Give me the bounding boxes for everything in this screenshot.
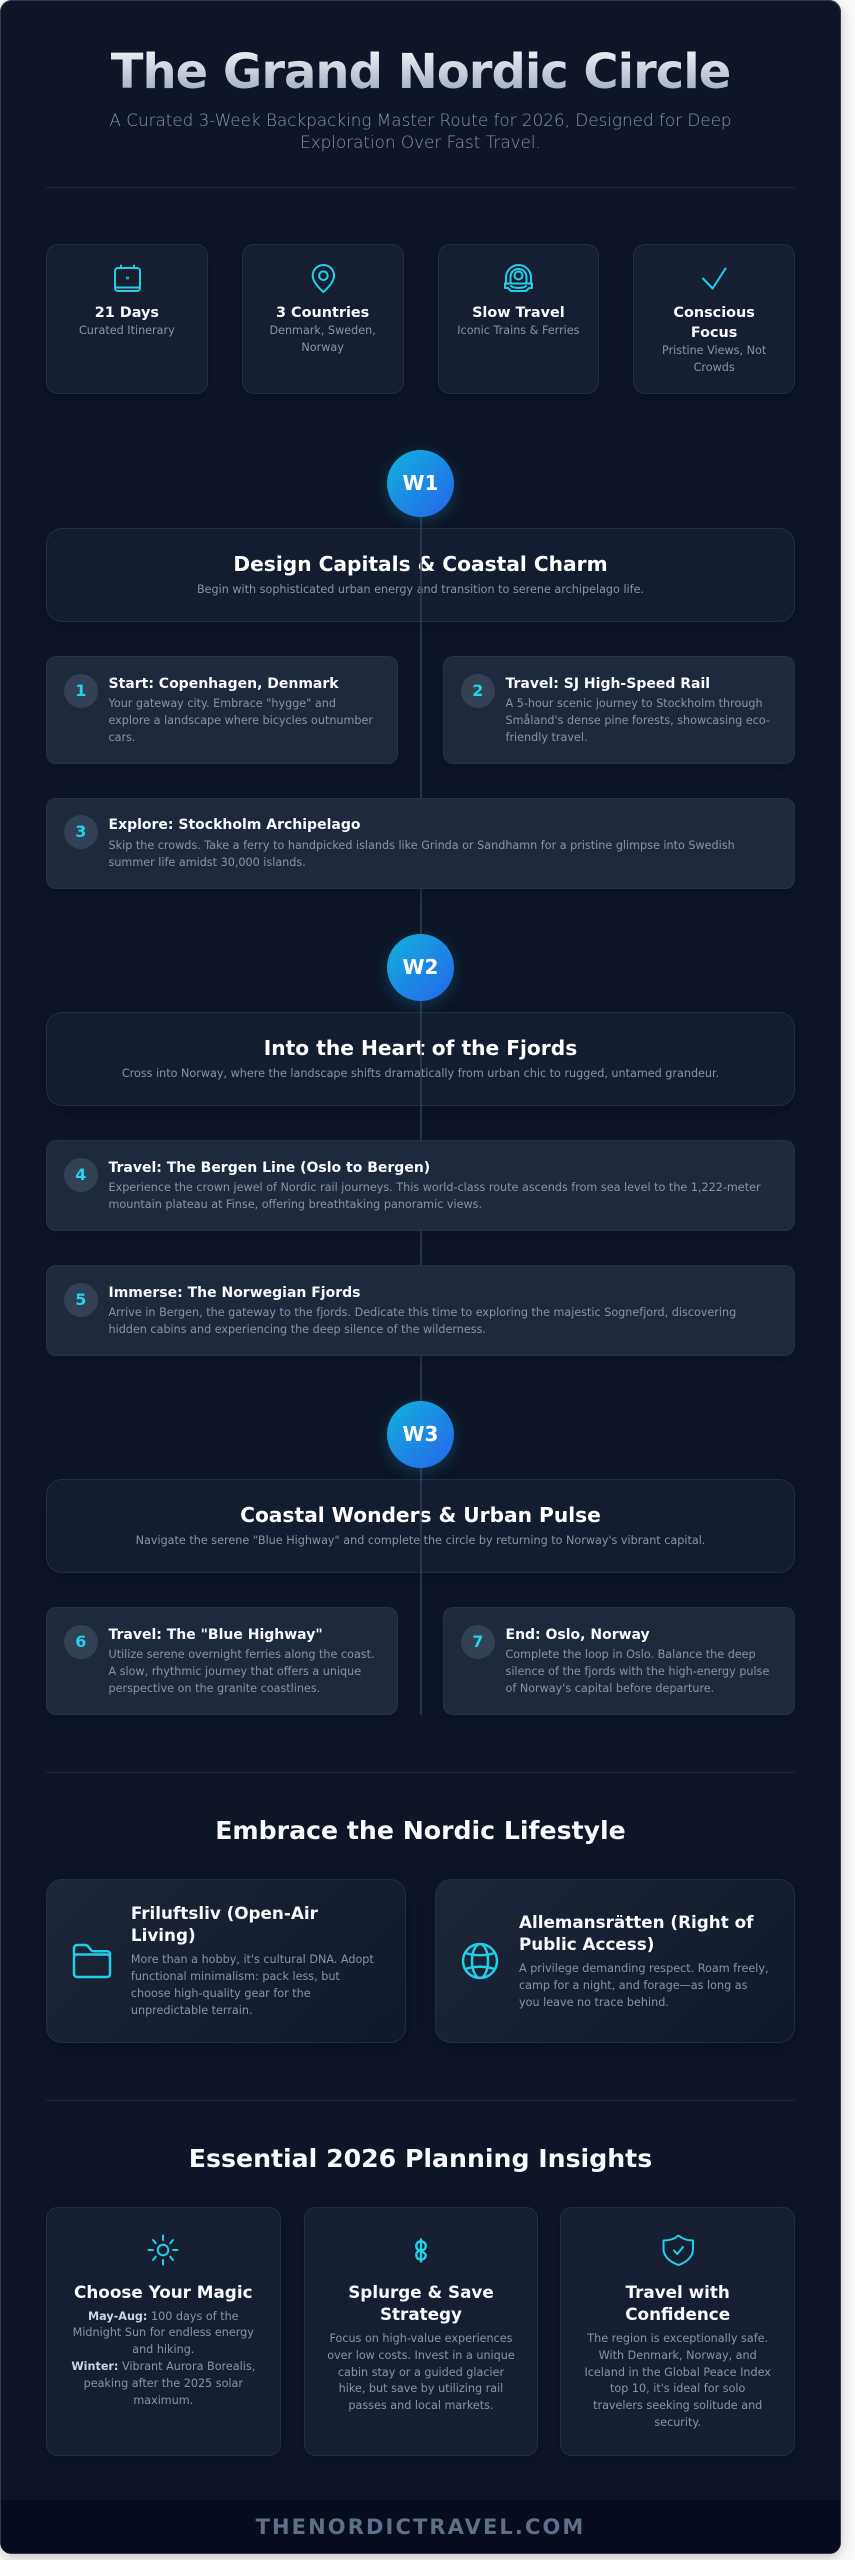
step description: perspective on the granite coastlines. (108, 1682, 320, 1695)
stat caption (662, 344, 766, 374)
panel: stat slow travel (438, 244, 599, 394)
step description: cars. (108, 731, 136, 744)
insight title: Confidence (625, 2304, 730, 2324)
step number (64, 1158, 98, 1192)
lifestyle title: Friluftsliv (Open-Air (131, 1903, 318, 1923)
panel: stat conscious focus (633, 244, 795, 394)
lifestyle description (519, 1962, 769, 2009)
insight description: May-Aug: 100 days of the (88, 2310, 239, 2323)
stat heading (673, 305, 755, 341)
step description: friendly travel. (506, 731, 588, 744)
panel: stat 3 countries (242, 244, 404, 394)
insight description: Winter: Vibrant Aurora Borealis, (71, 2360, 255, 2373)
week 1 badge (387, 450, 454, 517)
step 3 (46, 798, 795, 889)
week 3 header (46, 1479, 795, 1573)
lifestyle title: Living) (131, 1925, 196, 1945)
insight description: Iceland in the Global Peace Index (584, 2366, 771, 2379)
stat heading: 21 Days (95, 305, 159, 321)
week 3 badge (387, 1401, 454, 1468)
step number (64, 1625, 98, 1659)
step number: 5 (75, 1290, 86, 1309)
icon: folder (72, 1944, 112, 1978)
footer (1, 2500, 840, 2553)
step description: Complete the loop in Oslo. Balance the deep (506, 1648, 756, 1661)
step 5 (46, 1265, 795, 1356)
icon: map pin (312, 264, 336, 293)
insight description (327, 2332, 515, 2412)
step number: 4 (75, 1165, 86, 1184)
step description: explore a landscape where bicycles outnumber (108, 714, 373, 727)
step description (108, 1306, 736, 1336)
insight description: travelers seeking solitude and (593, 2399, 762, 2412)
stat caption: Iconic Trains & Ferries (457, 324, 580, 337)
icon: globe (462, 1942, 498, 1980)
subtitle (109, 110, 732, 152)
lifestyle title (519, 1912, 754, 1954)
insight description: peaking after the 2025 solar (84, 2377, 243, 2390)
step description: Your gateway city. Embrace "hygge" and (108, 697, 336, 710)
step 6 (46, 1607, 398, 1715)
panel: friluftsliv (46, 1879, 406, 2043)
insight description: over low costs. Invest in a unique (327, 2349, 515, 2362)
week 2 badge: W2 (402, 955, 438, 979)
stat heading: 3 Countries (276, 305, 369, 321)
step description: silence of the fjords with the high-energy pulse (506, 1665, 769, 1678)
insight description: hike, but save by utilizing rail (339, 2382, 503, 2395)
lifestyle description: you leave no trace behind. (519, 1996, 669, 2009)
lifestyle description: functional minimalism: pack less, but (131, 1970, 340, 1983)
panel: allemansrätten (435, 1879, 795, 2043)
icon: dollar (415, 2238, 427, 2263)
step description (108, 1181, 761, 1211)
panel: travel with confidence (560, 2207, 795, 2456)
week 1 header (46, 528, 795, 622)
icon: sun (148, 2234, 178, 2266)
insight description: Midnight Sun for endless energy (73, 2326, 254, 2339)
title: The Grand Nordic Circle (111, 44, 730, 100)
subtitle: Exploration Over Fast Travel. (300, 132, 541, 152)
week 2 intro: Cross into Norway, where the landscape shifts dramatically from urban chic to rugged, untamed grandeur. (122, 1067, 719, 1080)
insight title: Strategy (380, 2304, 462, 2324)
step description (108, 1648, 375, 1695)
lifestyle description (131, 1953, 374, 2017)
lifestyle description: choose high-quality gear for the (131, 1987, 311, 2000)
insight title (348, 2282, 494, 2324)
insight description (584, 2332, 771, 2429)
step number: 7 (472, 1632, 483, 1651)
week 3 badge: W3 (402, 1422, 438, 1446)
insight description: Focus on high-value experiences (329, 2332, 513, 2345)
icon: checkmark (702, 268, 726, 290)
step number (64, 1283, 98, 1317)
panel: choose your magic (46, 2207, 281, 2456)
insight description: maximum. (133, 2394, 193, 2407)
week 2 badge (387, 934, 454, 1001)
step title: Travel: The "Blue Highway" (108, 1627, 323, 1643)
step description: Småland's dense pine forests, showcasing eco- (506, 714, 770, 727)
step number: 1 (75, 681, 86, 700)
step description (506, 1648, 769, 1695)
insight description: The region is exceptionally safe. (587, 2332, 768, 2345)
stat heading: Slow Travel (472, 305, 565, 321)
step title: Start: Copenhagen, Denmark (108, 676, 339, 692)
lifestyle description: camp for a night, and forage—as long as (519, 1979, 747, 1992)
step number (64, 674, 98, 708)
step description: Utilize serene overnight ferries along the coast. (108, 1648, 375, 1661)
step number (64, 815, 98, 849)
icon: train (504, 264, 533, 292)
step 2 (443, 656, 795, 764)
insight description: passes and local markets. (348, 2399, 494, 2412)
panel: stat 21 days (46, 244, 208, 394)
step description: Arrive in Bergen, the gateway to the fjords. Dedicate this time to exploring the majestic Sognefjord, discovering (108, 1306, 736, 1319)
lifestyle title (131, 1903, 318, 1945)
step title: Immerse: The Norwegian Fjords (108, 1285, 360, 1301)
week 3 heading: Coastal Wonders & Urban Pulse (240, 1503, 601, 1527)
insight description: security. (654, 2416, 701, 2429)
insight title: Choose Your Magic (74, 2282, 253, 2302)
insight description: and hiking. (132, 2343, 194, 2356)
panel: splurge and save (304, 2207, 538, 2456)
insight description: cabin stay or a guided glacier (338, 2366, 504, 2379)
step number (461, 1625, 495, 1659)
step description (108, 839, 735, 869)
step title: Explore: Stockholm Archipelago (108, 817, 360, 833)
step description: Skip the crowds. Take a ferry to handpicked islands like Grinda or Sandhamn for a pristine glimpse into Swedish (108, 839, 735, 852)
step 4 (46, 1140, 795, 1231)
icon: shield (662, 2234, 694, 2266)
lifestyle title: Public Access) (519, 1934, 654, 1954)
insight title: Splurge & Save (348, 2282, 494, 2302)
step number (461, 674, 495, 708)
stat caption (269, 324, 376, 354)
step description: Experience the crown jewel of Nordic rail journeys. This world-class route ascends from sea level to the 1,222-meter (108, 1181, 761, 1194)
step title: Travel: The Bergen Line (Oslo to Bergen) (108, 1160, 430, 1176)
step description: A slow, rhythmic journey that offers a unique (108, 1665, 361, 1678)
step number: 6 (75, 1632, 86, 1651)
stat caption: Denmark, Sweden, (269, 324, 376, 337)
step 7 (443, 1607, 795, 1715)
step description: A 5-hour scenic journey to Stockholm through (506, 697, 763, 710)
step description: of Norway's capital before departure. (506, 1682, 714, 1695)
week 1 heading: Design Capitals & Coastal Charm (233, 552, 608, 576)
week 1 badge: W1 (402, 471, 438, 495)
insight description (71, 2310, 255, 2407)
insight description: top 10, it's ideal for solo (610, 2382, 745, 2395)
lifestyle description: A privilege demanding respect. Roam freely, (519, 1962, 769, 1975)
stat caption: Crowds (694, 361, 735, 374)
footer website: THENORDICTRAVEL.COM (256, 2515, 585, 2539)
lifestyle title: Allemansrätten (Right of (519, 1912, 753, 1932)
icon: calendar (114, 264, 141, 292)
heading: lifestyle: Embrace the Nordic Lifestyle (215, 1816, 626, 1845)
subtitle: A Curated 3-Week Backpacking Master Route for 2026, Designed for Deep (109, 110, 732, 130)
stat heading: Conscious (673, 305, 755, 321)
timeline line (420, 480, 422, 1715)
step description (506, 697, 770, 744)
step description (108, 697, 373, 744)
stat heading: Focus (691, 325, 737, 341)
heading: planning insights: Essential 2026 Planning Insights (189, 2144, 652, 2173)
insight description: With Denmark, Norway, and (599, 2349, 757, 2362)
stat caption: Curated Itinerary (79, 324, 175, 337)
step description: mountain plateau at Finse, offering breathtaking panoramic views. (108, 1198, 482, 1211)
insight title: Travel with (626, 2282, 730, 2302)
week 3 intro: Navigate the serene "Blue Highway" and complete the circle by returning to Norway's vibrant capital. (136, 1534, 705, 1547)
step description: summer life amidst 30,000 islands. (108, 856, 306, 869)
week 1 intro: Begin with sophisticated urban energy and transition to serene archipelago life. (197, 583, 644, 596)
lifestyle description: unpredictable terrain. (131, 2004, 253, 2017)
stat caption: Pristine Views, Not (662, 344, 766, 357)
week 2 header (46, 1012, 795, 1106)
step description: hidden cabins and experiencing the deep silence of the wilderness. (108, 1323, 486, 1336)
insight title (625, 2282, 730, 2324)
step title: End: Oslo, Norway (506, 1627, 650, 1643)
step number: 3 (75, 822, 86, 841)
step number: 2 (472, 681, 483, 700)
week 2 heading: Into the Heart of the Fjords (264, 1036, 577, 1060)
stat caption: Norway (301, 341, 344, 354)
step 1 (46, 656, 398, 764)
step title: Travel: SJ High-Speed Rail (506, 676, 710, 692)
lifestyle description: More than a hobby, it's cultural DNA. Adopt (131, 1953, 374, 1966)
